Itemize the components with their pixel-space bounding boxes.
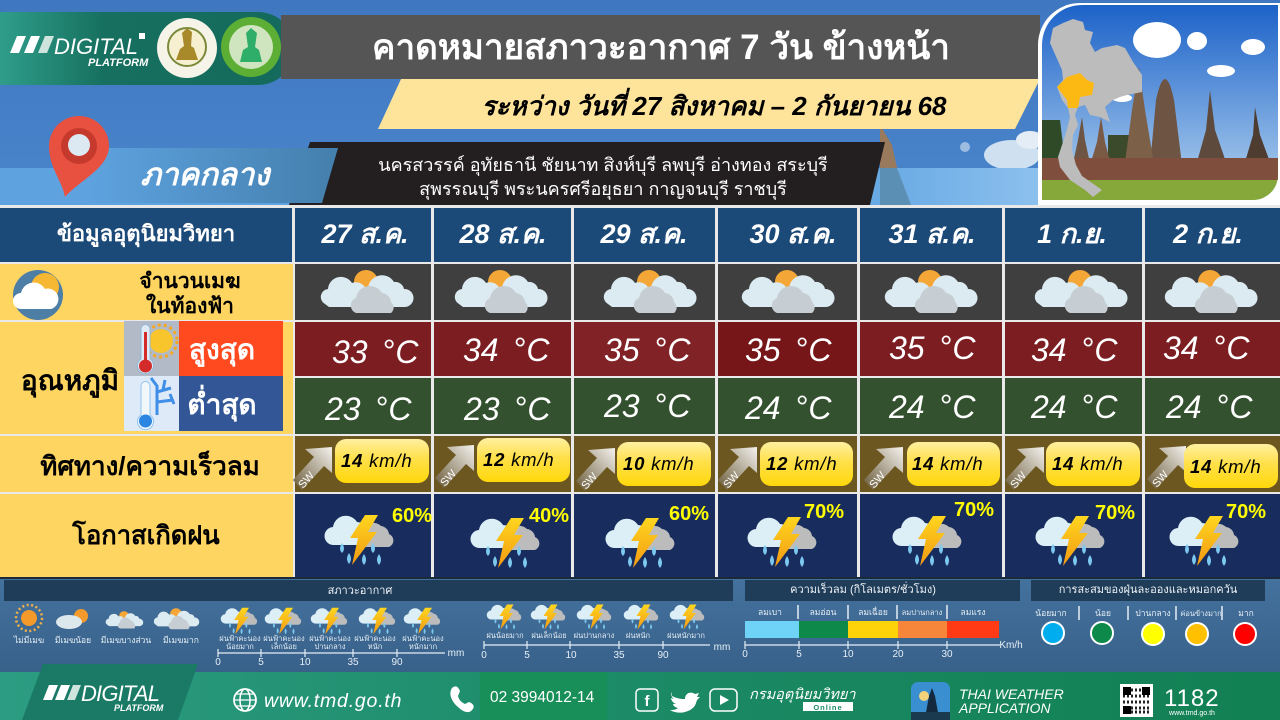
- row: maximum temperature: °: [1081, 331, 1094, 367]
- rain scale: 10: [565, 650, 577, 661]
- row: minimum temperature: 23: [604, 388, 640, 424]
- label: maximum: [179, 321, 283, 376]
- thunderstorm scale: ปานกลาง: [314, 642, 346, 651]
- row: minimum temperature: C: [952, 389, 976, 425]
- app icon: [911, 682, 950, 720]
- thunderstorm scale: หนักมาก: [409, 642, 437, 651]
- row: minimum temperature: °: [939, 388, 952, 424]
- forecast table background: [0, 205, 1280, 577]
- row: minimum temperature: C: [1094, 389, 1118, 425]
- row: maximum temperature: 34: [1163, 330, 1199, 366]
- tmd online label: [749, 687, 856, 712]
- wind arrows: SW: [438, 467, 459, 489]
- label: minimum: ต่ำสุด: [187, 384, 257, 422]
- legend: weather conditions: มีเมฆมาก: [163, 635, 199, 645]
- row: rain chance: โอกาสเกิดฝน: [71, 520, 220, 550]
- row: rain chance: 40%: [529, 505, 569, 527]
- row: wind: 14 km/h: [1052, 453, 1123, 474]
- rain scale: [481, 604, 730, 661]
- row: wind: ทิศทาง/ความเร็วลม: [40, 450, 260, 481]
- legend: weather conditions: [4, 580, 733, 668]
- row: maximum temperature: 33: [332, 334, 368, 370]
- website: www.tmd.go.th: [264, 690, 402, 712]
- thunderstorm scale: ฝนฟ้าคะนอง: [354, 634, 396, 643]
- emblem: ministry seal: [157, 18, 217, 78]
- icon: sunny: [16, 605, 42, 631]
- emblem: meteorological department seal: [221, 17, 281, 77]
- legend: wind speed: 5: [796, 649, 802, 660]
- table header row: 1 ก.ย.: [1037, 219, 1107, 249]
- date range banner: [378, 79, 1040, 129]
- row: minimum temperature: C: [1229, 389, 1253, 425]
- thunderstorm scale: ฝนฟ้าคะนอง: [402, 634, 444, 643]
- row: minimum temperature: °: [514, 390, 527, 426]
- legend: weather conditions: ไม่มีเมฆ: [13, 635, 44, 645]
- table header row: 27 ส.ค.: [320, 219, 409, 249]
- row: maximum temperature: °: [382, 333, 395, 369]
- table header row: 30 ส.ค.: [749, 219, 837, 249]
- app name: [958, 686, 1064, 716]
- thunderstorm scale: ฝนฟ้าคะนอง: [309, 634, 351, 643]
- footer logo: DIGITAL: [81, 681, 160, 706]
- row: rain chance: 60%: [669, 503, 709, 525]
- province list panel: สุพรรณบุรี พระนครศรีอยุธยา กาญจนบุรี ราชบุรี: [419, 179, 787, 200]
- legend: dust and smog: ปานกลาง: [1135, 608, 1171, 618]
- row label: temperature: [0, 321, 293, 434]
- legend: weather conditions: มีเมฆน้อย: [55, 635, 91, 645]
- rain scale: ฝนหนักมาก: [667, 631, 705, 640]
- label: minimum: [179, 376, 283, 431]
- row: maximum temperature: °: [513, 331, 526, 367]
- wind arrows: SW: [1008, 469, 1029, 491]
- rain scale: 35: [613, 650, 625, 661]
- legend: wind speed: ลมเฉื่อย: [858, 606, 888, 617]
- legend: wind speed: 0: [742, 649, 748, 660]
- legend: wind speed: 30: [941, 649, 953, 660]
- row: cloud cover: [0, 264, 1280, 320]
- legend: dust and smog: น้อยมาก: [1035, 608, 1067, 618]
- icon: cloud and sun: [13, 270, 63, 320]
- icon: phone: [450, 686, 474, 712]
- legend: dust and smog: ค่อนข้างมาก: [1180, 609, 1222, 618]
- rain scale: ฝนหนัก: [626, 631, 650, 640]
- app name: APPLICATION: [958, 700, 1051, 716]
- rain scale: 90: [657, 650, 669, 661]
- row: minimum temperature: 23: [464, 391, 500, 427]
- legend: wind speed: 20: [892, 649, 904, 660]
- row: maximum temperature: °: [795, 331, 808, 367]
- row: minimum temperature: C: [527, 391, 551, 427]
- province list panel: [289, 142, 885, 205]
- thunderstorm scale: [215, 608, 464, 668]
- rain scale: 0: [481, 650, 487, 661]
- row: maximum temperature: 35: [889, 330, 925, 366]
- legend: dust and smog: [1031, 580, 1265, 645]
- thunderstorm scale: ฝนฟ้าคะนอง: [219, 634, 261, 643]
- legend background: [0, 577, 1280, 673]
- table header row: ข้อมูลอุตุนิยมวิทยา: [57, 221, 235, 248]
- row: minimum temperature: C: [808, 390, 832, 426]
- thunderstorm scale: mm: [448, 648, 464, 659]
- thunderstorm scale: เล็กน้อย: [271, 641, 297, 651]
- row: wind: 14 km/h: [341, 450, 412, 471]
- tmd online label: Online: [813, 703, 843, 712]
- legend: weather conditions: สภาวะอากาศ: [328, 585, 392, 597]
- logo bar: digital platform: [0, 12, 294, 85]
- legend: wind speed: 10: [842, 649, 854, 660]
- row: rain chance: 70%: [954, 499, 994, 521]
- photo clouds: [1112, 22, 1265, 102]
- photo and map panel: [1038, 3, 1280, 205]
- thunderstorm scale: น้อยมาก: [226, 642, 254, 651]
- table header row: 31 ส.ค.: [888, 219, 976, 249]
- wind speed pills: [335, 438, 1278, 488]
- row: maximum temperature: °: [939, 329, 952, 365]
- wind arrows: SW: [867, 469, 888, 491]
- hotline 1182: www.tmd.go.th: [1168, 710, 1215, 717]
- thunderstorm scale: 0: [215, 657, 221, 668]
- row: minimum temperature: 24: [1166, 389, 1202, 425]
- title bar: [281, 15, 1040, 79]
- thunderstorm scale: 35: [347, 657, 359, 668]
- row: minimum temperature: 24: [889, 389, 925, 425]
- thunderstorm scale: ฝนฟ้าคะนอง: [263, 634, 305, 643]
- row: maximum temperature: [295, 322, 1280, 376]
- thunderstorm scale: 10: [299, 657, 311, 668]
- qr code: [1120, 684, 1153, 717]
- label: maximum: สูงสุด: [189, 334, 255, 367]
- row: maximum temperature: 34: [1031, 332, 1067, 368]
- thunderstorm scale: หนัก: [368, 642, 382, 651]
- legend: dust and smog: มาก: [1238, 608, 1254, 618]
- phone number: 02 3994012-14: [490, 689, 595, 706]
- row: maximum temperature: °: [654, 331, 667, 367]
- legend: wind speed: ความเร็วลม (กิโลเมตร/ชั่วโมง): [790, 581, 936, 596]
- row: maximum temperature: °: [1213, 329, 1226, 365]
- row: wind: 12 km/h: [483, 449, 554, 470]
- row: rain chance: 70%: [1226, 501, 1266, 523]
- wind arrows: SW: [1150, 468, 1171, 490]
- legend: wind speed: Km/h: [999, 640, 1023, 651]
- row: minimum temperature: °: [795, 389, 808, 425]
- row: maximum temperature: C: [1094, 332, 1118, 368]
- row: maximum temperature: 35: [745, 332, 781, 368]
- date range banner: ระหว่าง วันที่ 27 สิงหาคม – 2 กันยายน 68: [482, 87, 947, 121]
- thunderstorm scale: 90: [391, 657, 403, 668]
- rain scale: ฝนเล็กน้อย: [531, 630, 567, 640]
- rain scale: ฝนน้อยมาก: [486, 631, 524, 640]
- row: minimum temperature: [295, 378, 1280, 434]
- thunderstorm scale: 5: [258, 657, 264, 668]
- row: minimum temperature: °: [1081, 388, 1094, 424]
- row: wind: 14 km/h: [1190, 456, 1261, 477]
- photo lawn: [1042, 175, 1278, 200]
- row: wind: [0, 436, 1280, 492]
- row: minimum temperature: °: [375, 390, 388, 426]
- region banner: ภาคกลาง: [141, 157, 272, 192]
- province list panel: นครสวรรค์ อุทัยธานี ชัยนาท สิงห์บุรี ลพบุรี อ่างทอง สระบุรี: [378, 155, 828, 176]
- icon: hot thermometer: [124, 321, 179, 376]
- row: minimum temperature: °: [1216, 388, 1229, 424]
- legend: dust and smog: การสะสมของฝุ่นละอองและหมอกควัน: [1059, 584, 1238, 596]
- table header row: [0, 208, 1280, 262]
- table header row: 2 ก.ย.: [1172, 219, 1243, 249]
- row: maximum temperature: C: [1226, 330, 1250, 366]
- row: maximum temperature: C: [667, 332, 691, 368]
- table header row: 29 ส.ค.: [599, 219, 688, 249]
- rain scale: ฝนปานกลาง: [574, 631, 615, 640]
- row: rain chance: 70%: [804, 501, 844, 523]
- logo bar: digital platform: PLATFORM: [88, 57, 149, 69]
- wind arrows: [293, 445, 1186, 492]
- row: maximum temperature: C: [526, 332, 550, 368]
- wind arrows: SW: [579, 470, 600, 492]
- legend: wind speed: ลมปานกลาง: [902, 608, 943, 617]
- wind arrows: SW: [721, 469, 742, 491]
- legend: weather conditions: มีเมฆบางส่วน: [101, 635, 151, 645]
- icon: few clouds: [56, 609, 88, 629]
- logo bar: digital platform: DIGITAL: [54, 34, 138, 59]
- wind arrows: SW: [296, 469, 317, 491]
- row: rain chance: [0, 494, 1280, 577]
- table bottom edge: [0, 577, 1280, 579]
- title bar: คาดหมายสภาวะอากาศ 7 วัน ข้างหน้า: [372, 28, 950, 67]
- legend: wind speed: ลมแรง: [960, 607, 986, 617]
- row: cloud cover: จำนวนเมฆ: [139, 270, 241, 293]
- row: wind: 10 km/h: [623, 453, 694, 474]
- row: rain chance: 70%: [1095, 502, 1135, 524]
- row label: temperature: อุณหภูมิ: [21, 365, 119, 398]
- background sky: [0, 0, 1280, 207]
- footer bar: [0, 664, 1280, 720]
- social media icons: [636, 689, 737, 713]
- footer logo: PLATFORM: [114, 703, 164, 713]
- table header row: 28 ส.ค.: [458, 219, 547, 249]
- tmd online label: กรมอุตุนิยมวิทยา: [749, 687, 856, 703]
- row: maximum temperature: C: [395, 334, 419, 370]
- row: minimum temperature: 24: [1031, 389, 1067, 425]
- row: minimum temperature: C: [667, 388, 691, 424]
- hotline 1182: 1182: [1164, 685, 1220, 712]
- row: cloud cover: ในท้องฟ้า: [146, 293, 234, 318]
- legend: dust and smog: น้อย: [1095, 608, 1111, 618]
- icon: cold thermometer: [124, 376, 179, 431]
- row: minimum temperature: 24: [745, 390, 781, 426]
- footer logo: [22, 664, 198, 720]
- rain scale: 5: [524, 650, 530, 661]
- row: maximum temperature: 35: [604, 332, 640, 368]
- row: minimum temperature: °: [654, 387, 667, 423]
- row: maximum temperature: 34: [463, 332, 499, 368]
- row: maximum temperature: C: [952, 330, 976, 366]
- row: wind: 12 km/h: [766, 453, 837, 474]
- social media icons: f: [644, 693, 650, 710]
- photo temple prangs: [1042, 67, 1278, 180]
- row: maximum temperature: C: [808, 332, 832, 368]
- row: rain chance: 60%: [392, 505, 432, 527]
- icon: location pin: [49, 116, 109, 197]
- region banner: [84, 148, 338, 203]
- legend: wind speed: ลมเบา: [758, 607, 782, 617]
- legend: wind speed: ลมอ่อน: [810, 607, 837, 617]
- row: minimum temperature: C: [388, 391, 412, 427]
- phone number: [480, 672, 607, 720]
- map of Thailand: [1050, 19, 1142, 197]
- app name: THAI WEATHER: [959, 686, 1064, 702]
- row: wind: 14 km/h: [912, 453, 983, 474]
- row: minimum temperature: 23: [325, 391, 361, 427]
- legend: wind speed: [742, 580, 1023, 660]
- rain scale: mm: [714, 642, 730, 653]
